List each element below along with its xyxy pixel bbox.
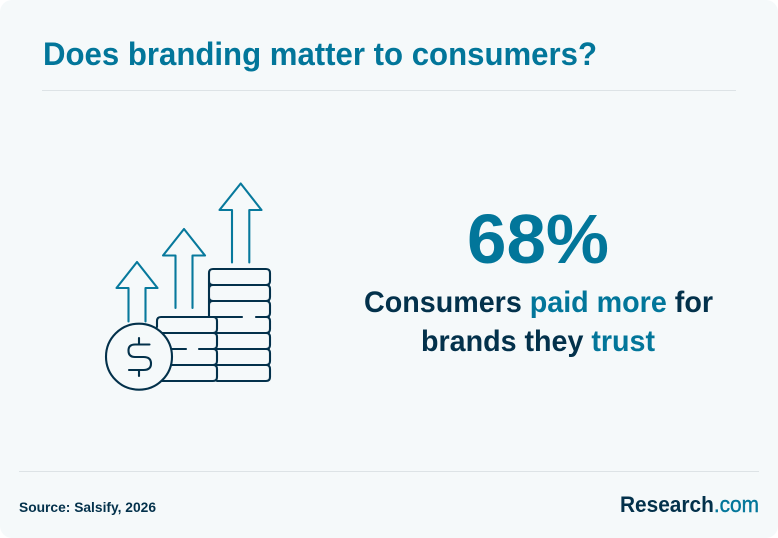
statistic: 68% bbox=[467, 200, 609, 278]
icon: coin stacks with rising arrows bbox=[106, 184, 270, 390]
statement line 1: Consumers paid more for bbox=[364, 286, 713, 319]
statement bbox=[364, 286, 713, 358]
icon: left coin stack bbox=[157, 317, 217, 381]
title: Does branding matter to consumers? bbox=[43, 36, 597, 72]
icon: arrows bbox=[116, 184, 262, 322]
icon: right coin stack bbox=[209, 269, 270, 381]
source note: Source: Salsify, 2026 bbox=[19, 499, 156, 515]
logo: Research.com: Research.com bbox=[620, 492, 759, 517]
icon: dollar coin bbox=[106, 324, 172, 390]
statement line 2: brands they trust bbox=[421, 325, 655, 358]
